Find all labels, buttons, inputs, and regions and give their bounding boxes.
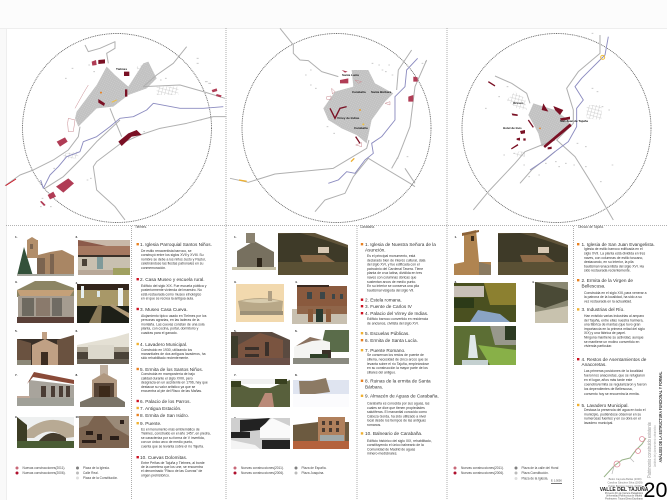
item 2: está restaurada como museo etnológico bbox=[141, 292, 201, 296]
item 2: 2. Casa Museo y escuela rural. bbox=[140, 277, 205, 282]
item 4: los dependientes de Bellescusa, bbox=[584, 387, 633, 391]
item 7: 7. Puente Romano. bbox=[365, 348, 405, 353]
item 3: Ninguna mantiene su actividad, aunque bbox=[584, 336, 644, 340]
photo 4 wash house bbox=[76, 281, 129, 323]
item 3: Alojamiento típico usado en Tielmes por los bbox=[141, 314, 207, 318]
item 4: manantiales de dos antiguos lavaderos, ha bbox=[141, 352, 206, 356]
place labels: Carabaña: Carabaña bbox=[354, 126, 368, 130]
photo 8 snowy ruin: 8. bbox=[295, 373, 298, 377]
item 10: Edificio histórico del siglo XIX, rehabilitado, bbox=[367, 439, 432, 443]
legend: Orusco: Plaza Constitución. bbox=[522, 471, 549, 475]
item 6: 6. Palacio de los Parros. bbox=[140, 399, 191, 404]
legend: Tielmes: Calle Real. bbox=[83, 471, 99, 475]
photo 5 brick building: 5. bbox=[234, 329, 237, 333]
item 1: construyó entre los siglos XVII y XVIII. Su bbox=[141, 253, 204, 257]
photo 10 spa building bbox=[293, 416, 349, 449]
legend: Carabaña bbox=[234, 466, 327, 475]
place labels: Orusco: Orusco bbox=[513, 101, 524, 105]
item 2: Bellescusa. bbox=[582, 284, 605, 288]
photo 4 ruin rock: 4. bbox=[532, 280, 535, 284]
item 4: 4. Lavadero Municipal. bbox=[140, 342, 187, 347]
vertical subtitle: planeamiento: Análisis del planeamiento urbanístico bbox=[653, 425, 657, 467]
credits bbox=[607, 477, 643, 488]
item 7: Se conservan los restos de puente de bbox=[367, 353, 424, 357]
item 2: Edificio del siglo XIX. Fue escuela pública y bbox=[141, 284, 207, 288]
item 1: Asunción. bbox=[365, 248, 386, 252]
item 3: 3. Fuente de Carlos IV bbox=[365, 304, 413, 309]
legend: Carabaña: Nuevas construcciones(2011). bbox=[241, 466, 284, 470]
item 2: en el que se recrea la antigua aula. bbox=[141, 297, 194, 301]
item 5: municipio, pudiéndose observar en su bbox=[584, 412, 641, 416]
photo 3 fountain bbox=[234, 280, 284, 322]
item 9: cuenta que se levanta sobre el río Tajuña. bbox=[141, 444, 204, 448]
item 1: naves con columnas dóricas que bbox=[367, 276, 416, 280]
photo 7 station bbox=[15, 372, 74, 406]
item 2: 2. Ermita de la Virgen de bbox=[582, 278, 633, 283]
item 1: bautismal renacentista del siglo XVI. Ha bbox=[584, 264, 644, 268]
item 9: Carabaña es conocida por sus aguas, las bbox=[367, 402, 430, 406]
vertical title: Análisis de la estructura: ANÁLISIS DE LA ESTRUCTURA FUNCIONAL Y FORMAL bbox=[658, 371, 663, 462]
place labels: Carabaña: Carabaña bbox=[352, 90, 366, 94]
item 4: coenobio/ermita se regularizaron y fueron bbox=[584, 383, 647, 387]
item 9: se caracteriza por su forma de V invertida, bbox=[141, 436, 205, 440]
item 3: una fábrica de mantas (que tuvo gran bbox=[584, 323, 640, 327]
photo 2 hillside bbox=[498, 233, 568, 275]
subtitle lines: Universidad Politécnica de Madrid bbox=[606, 495, 643, 498]
item 3 bbox=[577, 307, 645, 348]
credits: Belén Cayuela Bellas (2009) bbox=[609, 477, 642, 481]
photo 3 river mill: 3. bbox=[454, 280, 457, 284]
photo 7 Roman bridge: 7. bbox=[234, 373, 237, 377]
section label: Orusco: Orusco de Tajuña. bbox=[578, 225, 604, 229]
item 1: 1. Iglesia de Nuestra Señora de la bbox=[365, 242, 436, 247]
section label: Tielmes: Tielmes. bbox=[135, 225, 147, 229]
item 1: declarado bien de interés cultural, data bbox=[367, 258, 426, 262]
item 2: vez restaurada en la actualidad. bbox=[584, 299, 632, 303]
item 7: sillares del antiguo. bbox=[367, 370, 396, 374]
item 4: fueron los anacoretas, que se refugiaron bbox=[584, 374, 645, 378]
photos: Tielmes bbox=[15, 235, 130, 448]
map: Orusco bbox=[462, 33, 651, 222]
location map: Valle del Tajuña bbox=[604, 436, 646, 477]
item 1: nombre se debe a los niños Justo y Pastor, bbox=[141, 257, 206, 261]
item 4: 4. Palacio del Virrey de Indias. bbox=[365, 311, 428, 316]
place labels: Carabaña: Virrey de Indias bbox=[337, 116, 360, 120]
legend: Orusco: Plaza de la Iglesia. bbox=[522, 476, 548, 480]
item 1: De estilo renacentista barroco, se bbox=[141, 249, 192, 253]
legend: Orusco bbox=[454, 466, 559, 480]
item 2: 2. Estela romana. bbox=[365, 297, 402, 302]
item 8: 8. Ruinas de la ermita de Santa bbox=[365, 378, 431, 384]
map circle 3 bbox=[462, 34, 651, 222]
item 10: Comunidad de Madrid de aguas bbox=[367, 447, 416, 451]
item 9: 9. Almacén de Aguas de Carabaña. bbox=[365, 394, 439, 398]
item 3: cuadras para el ganado. bbox=[141, 331, 178, 335]
photo 6 palace engraving: 6. bbox=[76, 329, 78, 333]
item 10: Entre Peñas de Tajuña y Tielmes, al borde bbox=[141, 461, 205, 465]
item 9: Es el monumento más emblemático de bbox=[141, 428, 200, 432]
photo 3 fountain: 3. bbox=[234, 280, 237, 284]
item 5: Destaca la presencia del agua en todo el bbox=[584, 408, 646, 412]
item 4: de ancianos, civilista del siglo XVI. bbox=[367, 322, 419, 326]
photo 1 church bbox=[232, 233, 276, 270]
item 2: Construida en el siglo XIII, para venerar a bbox=[584, 291, 647, 295]
item 1: patrocinio del Cardenal Tavera. Tiene bbox=[367, 267, 423, 271]
item 1: planta de cruz latina, dividida en tres bbox=[367, 271, 422, 275]
item 10: minero-medicinales. bbox=[367, 452, 397, 456]
item 1 bbox=[577, 242, 655, 273]
item 3: se mantiene un molino convertido en bbox=[584, 340, 640, 344]
map 1 contents bbox=[5, 42, 227, 220]
item 1: 1. Iglesia de San Juan Evangelista. bbox=[582, 242, 655, 247]
item 2: la patrona de la localidad, ha sido a su bbox=[584, 295, 642, 299]
item 3 bbox=[136, 307, 207, 335]
photo 5 hermitage bbox=[15, 329, 74, 365]
item 3: planta, con cocina, portal, dormitorio y bbox=[141, 327, 199, 331]
item 5: calidad durante el siglo XVIII, pero bbox=[141, 376, 193, 380]
vertical subtitle: patrimonio: Patrimonio construido existente bbox=[647, 422, 653, 478]
item 7: 7. Antigua Estación. bbox=[140, 406, 181, 411]
photo 4 wash house: 4. bbox=[76, 281, 78, 285]
item 3: montaña. Las cuevas constan de una sola bbox=[141, 322, 205, 326]
legend: Orusco: Nuevas construcciones(2006). bbox=[461, 471, 504, 475]
item 5: destacar su valor artístico ya que se bbox=[141, 385, 195, 389]
item 1: celebrándose las fiestas patronales en su bbox=[141, 262, 204, 266]
item 10: origen prehistórico. bbox=[141, 473, 170, 477]
subtitle lines: Proyecto Fin de Carrera Paisajístico bbox=[605, 492, 644, 495]
item 10: constituyendo el único balneario de la bbox=[367, 443, 424, 447]
credits: Pablo Barroso García (2009) bbox=[608, 484, 642, 488]
item 9: romanos. bbox=[367, 423, 381, 427]
item 5: Construida en mampostería de bajo bbox=[141, 372, 195, 376]
item 1: naves, con columnas de estilo toscano, bbox=[584, 256, 643, 260]
item 1: del siglo XVI, y fue edificada con el bbox=[367, 263, 420, 267]
photo 5 hermitage: 5. bbox=[15, 329, 18, 333]
map: Tielmes bbox=[5, 34, 227, 222]
legend: Tielmes: Plaza de la Constitución. bbox=[83, 476, 118, 480]
item 1 bbox=[136, 242, 212, 270]
place labels: Orusco: Hotel de Inés bbox=[503, 126, 522, 130]
legend: Carabaña: Nuevas construcciones(2006). bbox=[241, 471, 284, 475]
legend: Orusco: Nuevas construcciones(2011). bbox=[461, 466, 504, 470]
item 1: Es el principal monumento, está bbox=[367, 254, 415, 258]
item 4: convento hoy se encuentra la ermita. bbox=[584, 392, 640, 396]
legend: Tielmes: Nuevas construcciones(2006). bbox=[22, 471, 66, 475]
item 4: Anacoretas. bbox=[582, 362, 607, 367]
item 1: destacando, en su interior, la pila bbox=[584, 260, 634, 264]
map 3 contents bbox=[473, 33, 613, 220]
map circle 1 bbox=[22, 34, 212, 222]
item 4: Construido en 1930, utilizando los bbox=[141, 348, 192, 352]
item 9 bbox=[361, 394, 439, 427]
photo 9 bridge: 9. bbox=[15, 415, 18, 419]
photo 3 cave museum: 3. bbox=[15, 280, 18, 284]
item 4 bbox=[136, 342, 206, 360]
photos: Carabaña bbox=[231, 233, 349, 449]
item 3: 3. Industrias del Río. bbox=[582, 307, 624, 312]
item 1 bbox=[361, 242, 436, 292]
item 3: XIX) y una fábrica de papel. bbox=[584, 331, 626, 335]
photo 5 waterfall bbox=[454, 326, 516, 365]
item 4 bbox=[577, 357, 647, 396]
map circle 2 bbox=[242, 34, 431, 222]
item 10 bbox=[136, 455, 205, 477]
item 10: 10. Cuevas Dolomitas. bbox=[140, 455, 187, 460]
item 4: Edificio barroco convertido en residencia bbox=[367, 317, 428, 321]
item 5: lavadero municipal. bbox=[584, 421, 613, 425]
item 4: 4. Restos de Asentamientos de bbox=[582, 357, 647, 362]
section label: Carabaña: Carabaña. bbox=[360, 225, 375, 229]
legend: Tielmes bbox=[16, 466, 118, 480]
photo 6 white hermitage: 6. bbox=[295, 329, 298, 333]
item 10: el denominado "Risco de las Cuevas" de bbox=[141, 469, 202, 473]
item 1: sido restaurada recientemente. bbox=[584, 269, 631, 273]
photo 9 engraving: 9. bbox=[234, 416, 237, 420]
item 4: Las primeras posiciones de la localidad bbox=[584, 369, 643, 373]
photo 8 hermitage San Isidro bbox=[76, 365, 125, 407]
item 1: bautismal visigoda del siglo VII. bbox=[367, 288, 414, 292]
item 1: siglo XVII. La planta está dividida en tres bbox=[584, 252, 646, 256]
item 5: encuentra al pie del Risco de las Mañas. bbox=[141, 389, 202, 393]
photo 10 caves: 10. bbox=[76, 415, 80, 419]
item 1: 1. Iglesia Parroquial Santos Niños. bbox=[140, 242, 212, 247]
item 3: 3. Museo Casa Cueva. bbox=[140, 307, 188, 312]
item 9: cuales se dice que tienen propiedades bbox=[367, 406, 425, 410]
item 2 bbox=[136, 277, 207, 301]
photo 8 hermitage San Isidro: 8. bbox=[76, 373, 78, 377]
item 3: importancia en la primera mitad del siglo bbox=[584, 327, 645, 331]
item 9: Tielmes, construido en el año 1457, en piedra, bbox=[141, 432, 211, 436]
item 1: En su interior se conserva una pila bbox=[367, 284, 419, 288]
item 10: 10. Balneario de Carabaña. bbox=[365, 431, 422, 436]
item 3: del Tajuña, entre ellas nuestra harinera, bbox=[584, 318, 644, 322]
photo 8 snowy ruin bbox=[293, 373, 349, 407]
text column: Carabaña bbox=[361, 242, 439, 456]
legend: Tielmes: Plaza de la Iglesia. bbox=[83, 466, 110, 470]
place labels: Carabaña: Santa Lucía bbox=[342, 73, 359, 77]
item 8 bbox=[361, 378, 431, 390]
photo 9 bridge bbox=[15, 415, 74, 448]
item 9: 9. Puente. bbox=[140, 421, 161, 426]
item 9: salutíferas. El manantial conocido como bbox=[367, 410, 427, 414]
photo 9 engraving bbox=[231, 416, 290, 449]
item 10 bbox=[361, 431, 432, 456]
photo 10 caves bbox=[76, 415, 129, 448]
photo 2 hillside bbox=[278, 233, 348, 275]
photo 1 church: 1. bbox=[234, 235, 237, 239]
item 1: sustentan arcos de medio punto. bbox=[367, 280, 416, 284]
item 10: de la carretera que los une, se encuentra bbox=[141, 465, 203, 469]
item 3: personas agrarias, en las laderas de la bbox=[141, 318, 200, 322]
legend: Carabaña: Plaza de España. bbox=[302, 466, 327, 470]
item 5: 5. Ermita de los Santos Niños. bbox=[140, 367, 203, 372]
item 9: local desde los tiempos de las antiguas bbox=[367, 419, 426, 423]
item 2: posteriormente vivienda del maestro. No bbox=[141, 288, 202, 292]
photo 4 town hall: 4. bbox=[295, 280, 298, 284]
item 5: numerosas fuentes y en su obra en el bbox=[584, 417, 641, 421]
photos: Orusco bbox=[454, 230, 568, 365]
item 7: en su construcción la mayor parte de los bbox=[367, 366, 428, 370]
item 8: Bárbara. bbox=[365, 384, 383, 390]
item 5 bbox=[577, 403, 646, 425]
item 5: 5. Lavadero Municipal. bbox=[582, 403, 629, 408]
legend: Orusco: Plaza de la calle del Horal bbox=[522, 466, 559, 470]
photo 1 church: 1. bbox=[15, 235, 18, 239]
credits: Carolina Sánchez Silva (2009) bbox=[607, 480, 643, 484]
item 5 bbox=[136, 367, 208, 393]
place labels: Orusco bbox=[503, 101, 588, 130]
item 5: desgracia en un accidente en 1796, hay que bbox=[141, 381, 208, 385]
photo 3 cave museum bbox=[15, 280, 74, 323]
item 4: sido rehabilitado recientemente. bbox=[141, 356, 189, 360]
item 1: conmemoración. bbox=[141, 266, 166, 270]
text column: Orusco bbox=[577, 242, 655, 425]
item 7: levanta sobre el río Tajuña, empleándose bbox=[367, 362, 429, 366]
item 4 bbox=[361, 311, 428, 326]
item 7: sillería, necesidad de cinco arcos que se bbox=[367, 358, 428, 362]
map 2 contents bbox=[230, 28, 427, 212]
place labels: Carabaña bbox=[337, 73, 392, 130]
photo 10 spa building: 10. bbox=[295, 416, 299, 420]
map: Carabaña bbox=[230, 28, 431, 222]
photo 5 brick building bbox=[231, 329, 290, 365]
place labels: Carabaña: Santa Bárbara bbox=[371, 90, 392, 94]
place labels: Orusco: San Juan de Tajuña bbox=[560, 119, 588, 123]
subtitle lines bbox=[605, 492, 644, 500]
photo 1 church bbox=[15, 235, 74, 276]
photo 7 Roman bridge bbox=[231, 373, 290, 407]
photo 1 tower: 1. bbox=[454, 235, 457, 239]
photo 4 town hall bbox=[292, 280, 347, 324]
photo 2 school: 2. bbox=[76, 235, 78, 239]
item 3: Han existido varias industrias al amparo bbox=[584, 314, 644, 318]
legend: Tielmes: Nuevas construcciones(2011). bbox=[22, 466, 65, 470]
photo 6 palace engraving bbox=[76, 329, 129, 364]
item 9: con un único arco de medio punto, bbox=[141, 440, 193, 444]
text column: Tielmes bbox=[136, 242, 212, 477]
item 5: 5. Escuelas Públicas. bbox=[365, 331, 410, 336]
photo 2 school bbox=[76, 235, 130, 275]
item 3: vivienda particular. bbox=[584, 344, 612, 348]
photo 7 station: 7. bbox=[15, 373, 18, 377]
item 7 bbox=[361, 348, 429, 374]
item 9 bbox=[136, 421, 211, 448]
item 4: en el lugar, años más tarde este bbox=[584, 378, 632, 382]
photo 6 white hermitage bbox=[293, 329, 349, 364]
item 9: Cabeza Gorda, ha sido utilizado a nivel bbox=[367, 414, 426, 418]
scale bar: E: 1:5000 bbox=[551, 480, 562, 482]
item 2 bbox=[577, 278, 647, 303]
title: Valle del Tajuña: VALLE DEL TAJUÑA bbox=[600, 486, 649, 493]
item 8: 8. Ermita de San Isidro. bbox=[140, 413, 189, 418]
item 6: 6. Ermita de Santa Lucía. bbox=[365, 338, 418, 343]
place label: Tielmes: Tielmes bbox=[116, 67, 127, 71]
legend: Carabaña: Plaza Joaquina. bbox=[302, 471, 324, 475]
item 1: Iglesia de estilo barroco edificada en el bbox=[584, 247, 643, 251]
